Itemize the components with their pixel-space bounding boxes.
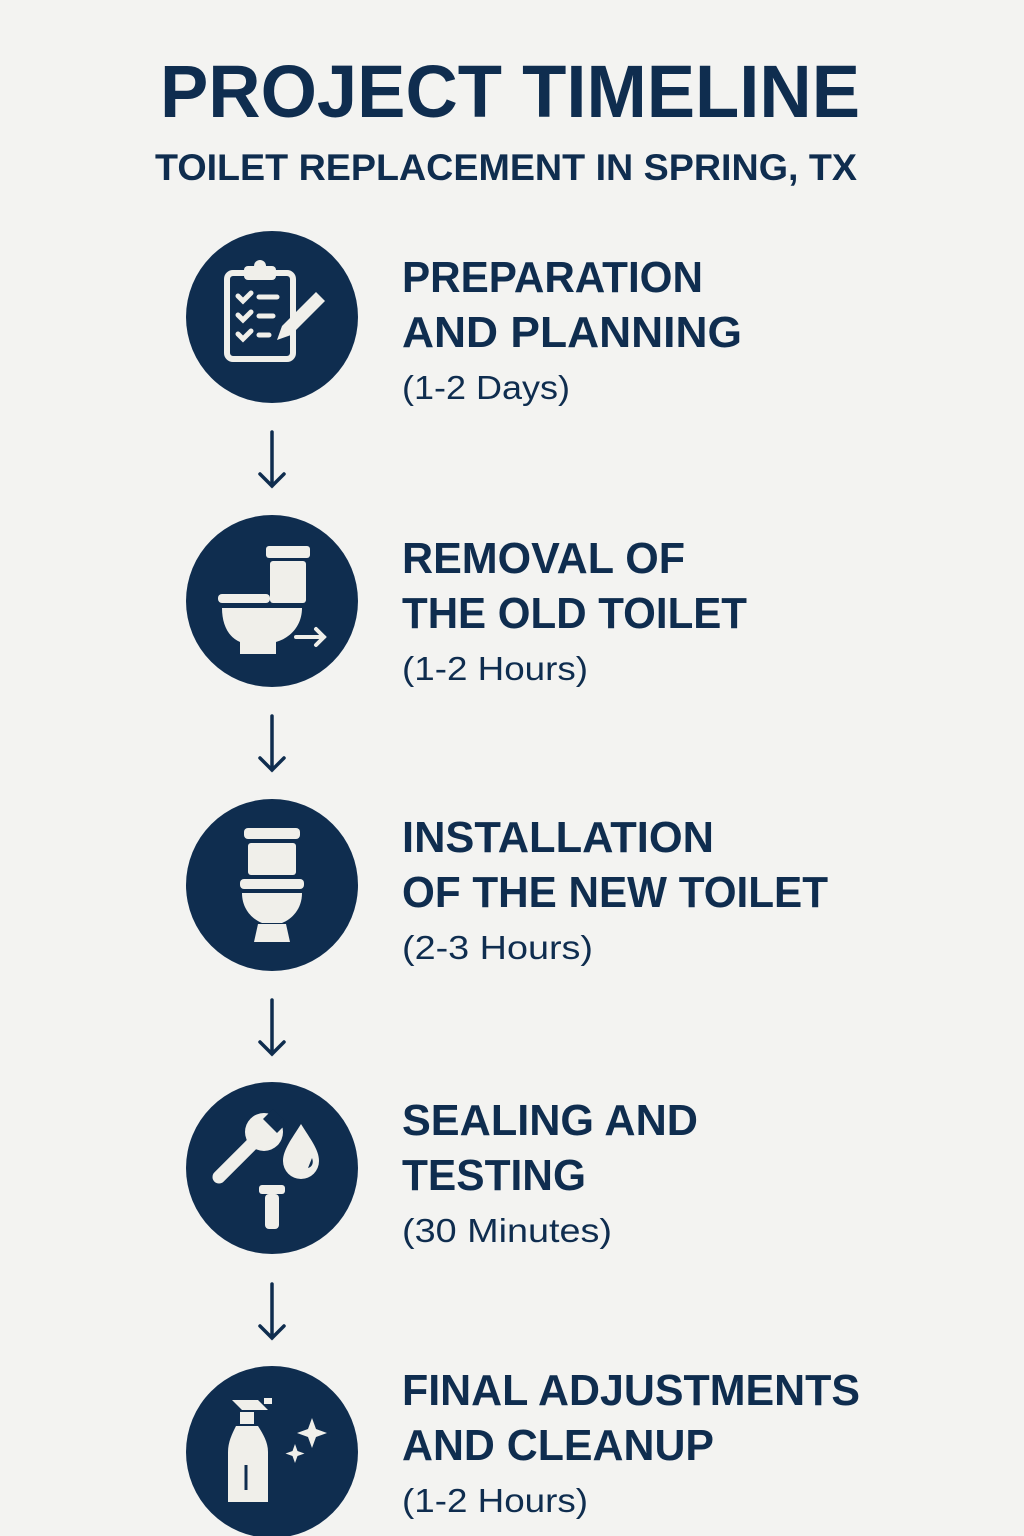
step 3: installation: OF THE NEW TOILET [402, 868, 828, 917]
step 1: preparation: AND PLANNING [402, 308, 742, 357]
step 1: preparation [186, 231, 742, 406]
step 5: cleanup [186, 1366, 860, 1536]
arrow 1 [260, 432, 284, 486]
arrow 2 [260, 716, 284, 770]
heading: INSTALLATION [402, 813, 714, 862]
icon: spray bottle [186, 1366, 358, 1536]
duration: (30 Minutes) [402, 1212, 612, 1249]
duration: (1-2 Days) [402, 369, 570, 406]
step 4: sealing: TESTING [402, 1151, 586, 1200]
arrow 3 [260, 1000, 284, 1054]
duration: (1-2 Hours) [402, 1482, 588, 1519]
duration: (2-3 Hours) [402, 929, 593, 966]
title: PROJECT TIMELINE [160, 50, 860, 133]
heading: FINAL ADJUSTMENTS [402, 1366, 860, 1415]
subtitle: TOILET REPLACEMENT IN SPRING, TX [155, 147, 857, 188]
step 5: cleanup: AND CLEANUP [402, 1421, 714, 1470]
heading: SEALING AND [402, 1096, 698, 1145]
step 2: removal: THE OLD TOILET [402, 589, 747, 638]
icon: wrench and drop [186, 1082, 358, 1254]
step 2: removal [186, 515, 747, 687]
arrow 4 [260, 1284, 284, 1338]
step 3: installation [186, 799, 828, 971]
icon: clipboard [186, 231, 358, 403]
icon: toilet removal [186, 515, 358, 687]
heading: REMOVAL OF [402, 534, 685, 583]
duration: (1-2 Hours) [402, 650, 588, 687]
heading: PREPARATION [402, 253, 703, 302]
icon: new toilet [186, 799, 358, 971]
step 4: sealing [186, 1082, 698, 1254]
